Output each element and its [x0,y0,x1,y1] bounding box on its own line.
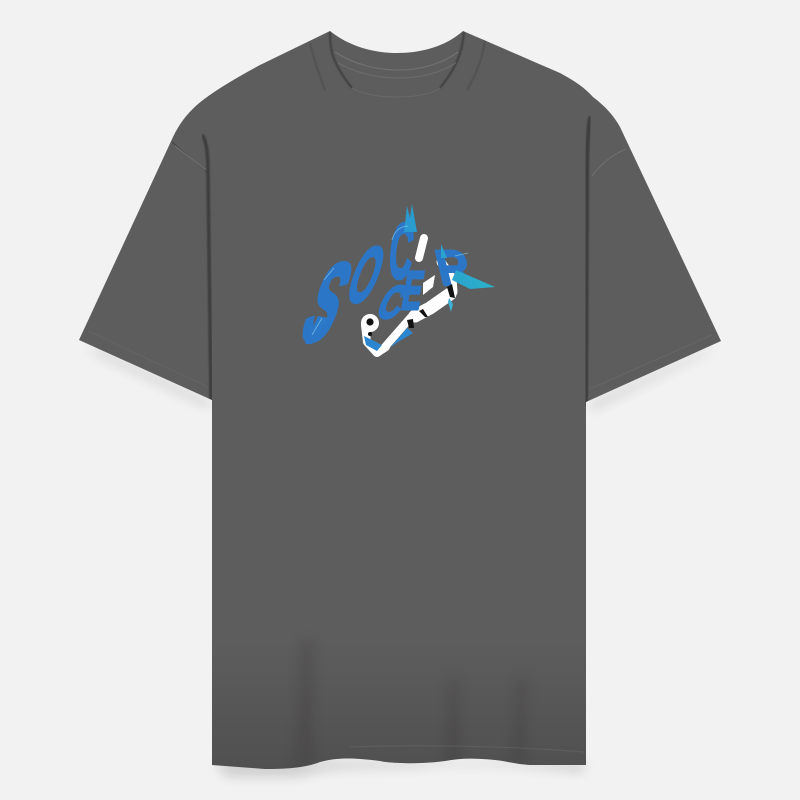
light brush streaks [312,226,468,335]
graphic: SOCCER brush lettering with soccer player [287,204,495,365]
lettering: C [385,208,417,295]
lettering: O [337,231,396,319]
soccer player figure [361,238,453,353]
collar seams [310,32,485,90]
brush wisps [305,204,495,344]
product image: t-shirt on light background [79,31,721,780]
lettering: S [287,242,367,365]
armhole seams [172,118,590,404]
lettering [287,208,477,365]
lettering: C [370,277,416,328]
lettering: E [398,261,428,321]
lettering: R [430,241,477,296]
drop shadows under hem and sleeves [85,343,716,776]
t-shirt body [79,31,721,770]
blue and black details on figure [364,284,455,351]
shirt shading and folds [172,32,712,769]
